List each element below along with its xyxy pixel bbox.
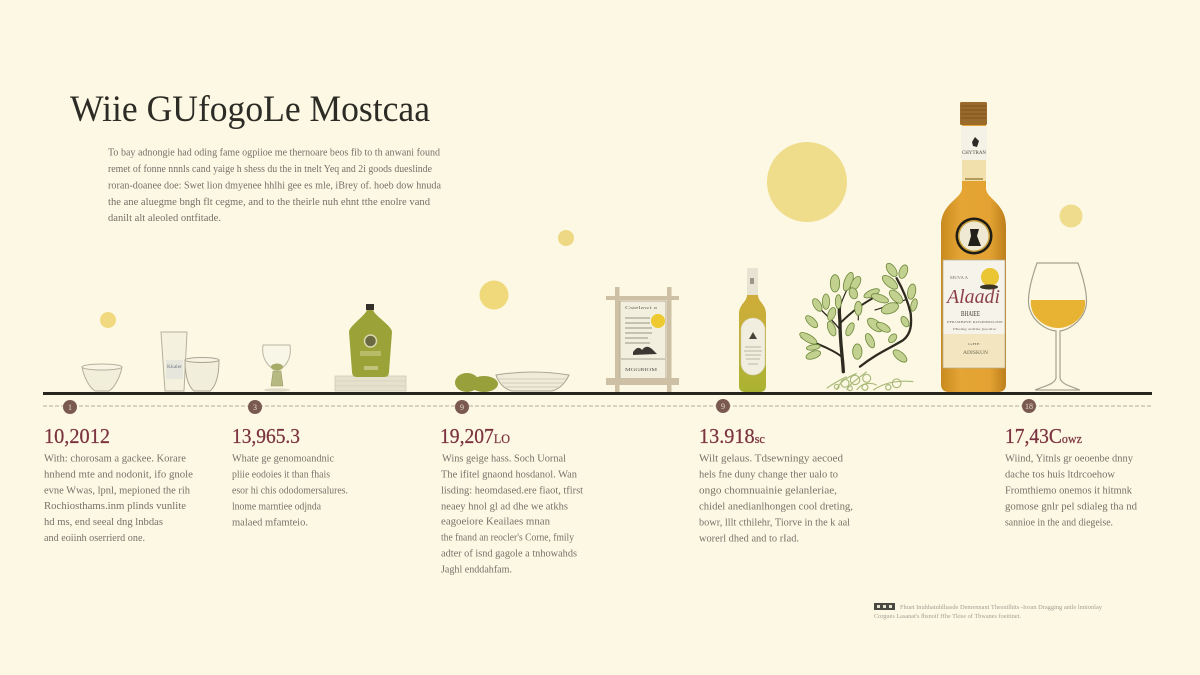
- timeline marker 3: [455, 400, 469, 414]
- timeline marker 4: 9: [721, 402, 725, 411]
- main label: GHE: [968, 342, 980, 346]
- column 3 number: 19,207LO: [440, 424, 510, 448]
- column 4 text: ongo chomnuainie gelanleriae,: [699, 486, 837, 496]
- column 1: [44, 424, 193, 544]
- footnote: Corgues Lasanat's fhsnoif Hhe Tkise of Thwanes foeitinet.: [874, 613, 1021, 620]
- column 4 text: [699, 454, 853, 544]
- column 4 text: Wilt gelaus. Tdsewningy aecoed: [699, 454, 844, 464]
- icon: small goblet: [263, 345, 290, 392]
- icon: framed poster: Cstelawt a: [625, 305, 657, 310]
- column 1 text: With: chorosam a gackee. Korare: [44, 454, 186, 464]
- column 3 text: eagoeiore Keailaes mnan: [441, 516, 551, 528]
- column 2: [232, 424, 348, 528]
- footnote: Fhuet Inuhhatuhlhasde Demennant Thesnilhits -Ioran Dragging antle lnnionlay: [900, 604, 1103, 611]
- column 3 text: Jaghl enddahfam.: [441, 564, 512, 576]
- icon: olive bottle on books: [335, 304, 406, 391]
- column 2 text: esor hi chis ododomersalures.: [232, 486, 348, 496]
- timeline baseline: [43, 392, 1152, 395]
- main label: Alaadi: [945, 286, 1000, 308]
- round seal: [956, 218, 992, 254]
- column 3 text: adter of isnd gagole a tnhowahds: [441, 548, 577, 560]
- icon: framed poster: [606, 287, 679, 392]
- column 1 text: hnhend mte and nodonit, ifo gnole: [44, 470, 193, 480]
- icon: tall glass with label: [161, 332, 187, 391]
- column 1 text: evne Wwas, lpnl, mepioned the rih: [44, 486, 191, 496]
- main label: BHAIEE: [961, 309, 980, 318]
- column 2 text: lnome marntiee odjnda: [232, 502, 321, 512]
- icon: glass bowl: [82, 364, 122, 391]
- column 5 text: Wiind, Yitnls gr oeoenbe dnny: [1005, 454, 1134, 464]
- intro text block: the ane aluegme bngh flt cegme, and to the theirle nuh ehnt tthe enolre vand: [108, 197, 430, 208]
- main label: ADISKUN: [963, 350, 988, 356]
- column 5 text: [1005, 454, 1138, 528]
- column 2 text: pliie eodoies it than fhais: [232, 470, 330, 480]
- neck label: [961, 126, 987, 160]
- sun circles: [100, 142, 1082, 328]
- icon: olive tree: [798, 261, 919, 391]
- column 5 text: dache tos huis ltdrcoehow: [1005, 470, 1115, 480]
- column 3 text: lisding: heomdased.ere fiaot, tfirst: [441, 486, 583, 496]
- column 1 text: and eoiinh oserrierd one.: [44, 533, 145, 544]
- icon: framed poster: MGGRIOM: [625, 367, 657, 372]
- column 4 number: 13.918sc: [699, 424, 765, 448]
- icon: small olive oil bottle: [739, 268, 766, 392]
- intro text block: To bay adnongie had oding fame ogpiioe me thernoare beos fib to th anwani found: [108, 148, 440, 158]
- column 5 number: 17,43Cowz: [1005, 424, 1082, 448]
- column 4 text: chidel anedianlhongen cool dreting,: [699, 502, 853, 512]
- column 4: [699, 424, 853, 544]
- column 5: [1005, 424, 1138, 528]
- icon: tall glass with label: Kkaler: [167, 365, 182, 370]
- intro text block: roran-doanee doe: Swet lion dmyenee hhlhi gee es mle, iBrey of. hoeb dow hnuda: [108, 180, 442, 192]
- intro text block: remet of fonne nnnls cand yaige h shess du the in tnelt Yeq and 2i goods dueslinde: [108, 164, 433, 175]
- intro text block: [108, 148, 442, 224]
- footnote icon: [874, 603, 895, 610]
- column 5 text: sannioe in the and diegeise.: [1005, 518, 1113, 528]
- title: Wiie GUfogoLe Mostcaa: [70, 89, 430, 130]
- column 1 text: hd ms, end seeal dng lnbdas: [44, 517, 163, 528]
- column 3 text: neaey hnol gl ad dhe we atkhs: [441, 502, 568, 512]
- column 1 text: [44, 454, 193, 544]
- timeline marker 4: [716, 399, 730, 413]
- tree leaves: [798, 261, 919, 364]
- main label: MUVA A: [950, 275, 968, 280]
- icon: olives: [455, 373, 498, 392]
- column 3 text: The ifitel gnaond hosdanol. Wan: [441, 470, 578, 480]
- column 1 text: Rochiosthams.inm plinds vunlite: [44, 501, 186, 512]
- timeline marker 2: [248, 400, 262, 414]
- column 3 text: Wins geige hass. Soch Uornal: [442, 454, 566, 464]
- shrub at tree base: [827, 372, 913, 391]
- neck label: CHYTRAN: [962, 151, 986, 156]
- column 2 text: malaed mfamteio.: [232, 518, 308, 528]
- column 3: [440, 424, 583, 576]
- icon: cup: [185, 358, 219, 391]
- dashed timeline: [43, 405, 1152, 407]
- footnote: [874, 603, 1103, 620]
- column 5 text: Fromthiemo onemos it hitmnk: [1005, 486, 1133, 496]
- timeline marker 2: 3: [253, 403, 257, 412]
- column 3 text: [441, 454, 583, 576]
- icon: wine glass: [1029, 263, 1086, 390]
- column 5 text: gomose gnlr pel sdialeg tha nd: [1005, 502, 1138, 512]
- column 4 text: bowr, lllt cthilehr, Tiorve in the k aal: [699, 518, 850, 528]
- timeline marker 3: 9: [460, 403, 464, 412]
- timeline marker 5: [1022, 399, 1036, 413]
- timeline marker 5: 18: [1025, 402, 1033, 411]
- main label: [943, 260, 1005, 368]
- column 3 text: the fnand an reocler's Corne, fmily: [441, 532, 575, 544]
- intro text block: danilt alt aleoled ontfitade.: [108, 213, 221, 224]
- column 1 number: 10,2012: [44, 424, 110, 448]
- timeline marker 1: 1: [68, 403, 72, 412]
- column 2 text: [232, 454, 348, 528]
- column 4 text: worerl dhed and to rIad.: [699, 534, 799, 544]
- column 2 text: Whate ge genomoandnic: [232, 454, 334, 464]
- tree branches: [802, 278, 911, 372]
- main label: Pheing antlite jusoibe: [953, 327, 997, 331]
- column 2 number: 13,965.3: [232, 424, 300, 448]
- icon: ribbed dish: [496, 372, 569, 391]
- column 4 text: hels fne duny change ther ualo to: [699, 470, 838, 480]
- main label: PHUMBINE ROSPIBOLINE: [947, 320, 1003, 324]
- timeline marker 1: [63, 400, 77, 414]
- icon: large amber bottle: [941, 102, 1006, 392]
